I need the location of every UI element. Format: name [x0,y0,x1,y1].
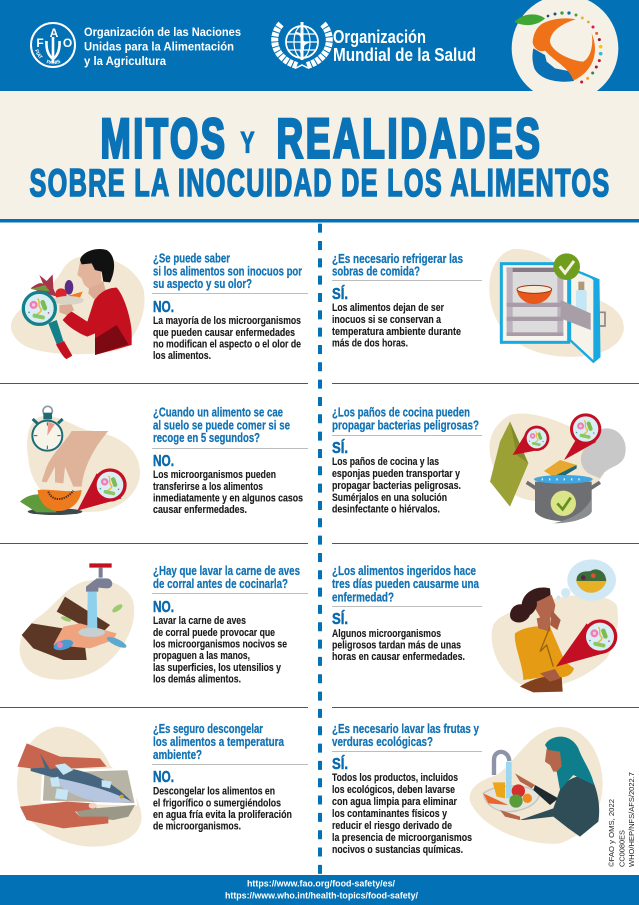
logo: FAO emblem [30,22,76,68]
answer: SÍ. [332,438,348,457]
explanation: el frigorífico o sumergiéndolos [153,798,281,810]
explanation: Los alimentos dejan de ser [332,302,445,314]
question: de corral antes de cocinarla? [153,577,288,591]
footer band with links [0,875,639,905]
illustration: hands under tap [20,563,134,680]
answer: SÍ. [332,284,348,303]
logo: FAO emblem: F [36,36,44,50]
illustration: open fridge with bowl [489,249,624,362]
copyright note: WHO/HEP/NFS/AFS/2022.7 [627,772,636,867]
panel: lavar carne de aves [20,563,308,686]
answer: SÍ. [332,609,348,628]
explanation: peligrosos tardan más de unas [332,640,461,652]
answer: SÍ. [332,754,348,773]
explanation [332,628,465,663]
FAO name: Organización de las Naciones [84,25,241,39]
FAO name: y la Agricultura [84,54,166,68]
explanation: temperatura ambiente durante [332,326,461,338]
question: los alimentos a temperatura [153,735,285,749]
question: si los alimentos son inocuos por [153,264,302,278]
explanation: de corral puede provocar que [153,627,275,639]
explanation: transferirse a los alimentos [153,481,263,493]
explanation: nocivos o sustancias químicas. [332,844,463,856]
question: ¿Los paños de cocina pueden [332,406,470,420]
panel: descongelar [17,722,308,847]
explanation [153,615,287,686]
answer: NO. [153,299,174,316]
explanation [153,469,303,516]
question: ¿Es seguro descongelar [153,722,263,736]
logo: FAO emblem: O [63,36,72,50]
question: ¿Cuando un alimento se cae [153,406,283,420]
explanation: Descongelar los alimentos en [153,786,275,798]
explanation: propaguen a las manos, [153,650,250,662]
explanation: Sumérjalos en una solución [332,492,447,504]
explanation: propagar bacterias peligrosas. [332,480,461,492]
question: enfermedad? [332,590,394,604]
question: tres días pueden causarme una [332,577,480,591]
panel: regla de los 5 segundos [20,406,308,516]
question: ¿Es necesario lavar las frutas y [332,722,479,736]
WHO name: Organización [333,27,426,47]
explanation: la presencia de microorganismos [332,832,472,844]
copyright note [607,772,636,867]
question: ¿Hay que lavar la carne de aves [153,564,300,578]
question [153,722,285,762]
question [332,564,480,604]
explanation: los alimentos. [153,350,211,362]
explanation [153,315,301,362]
explanation: los microorganismos nocivos se [153,638,287,650]
question [153,252,302,291]
question [332,252,463,278]
illustration: hands holding tray with fish [17,727,142,847]
header band [0,0,639,91]
panel: paños de cocina [332,406,626,523]
question: su aspecto y su olor? [153,277,252,291]
explanation [332,456,461,516]
explanation: Los microorganismos pueden [153,469,276,481]
question: ¿Es necesario refrigerar las [332,252,463,266]
question: verduras ecológicas? [332,735,433,749]
panel: alimentos de hace tres días [332,559,618,692]
question: propagar bacterias peligrosas? [332,418,479,432]
explanation: en agua fría evita la proliferación [153,809,292,821]
explanation [153,786,292,832]
question [332,406,479,432]
explanation: horas en causar enfermedades. [332,651,465,663]
panel: refrigerar sobras [332,249,624,362]
question: ambiente? [153,748,202,762]
explanation: causar enfermedades. [153,504,247,516]
explanation: inmediatamente y en algunos casos [153,492,303,504]
explanation: Todos los productos, incluidos [332,772,458,784]
explanation [332,772,472,856]
explanation: las superficies, los utensilios y [153,662,282,674]
panel: saber por aspecto y olor [11,249,308,362]
WHO name [333,27,476,65]
title [100,106,542,170]
question: ¿Los alimentos ingeridos hace [332,564,476,578]
logo: FAO emblem: FIAT PANIS [35,49,60,64]
explanation: con agua limpia para eliminar [332,796,458,808]
illustration: thinking woman [492,559,618,692]
explanation: los demás alimentos. [153,674,241,686]
explanation: los contaminantes físicos y [332,808,448,820]
question: recoge en 5 segundos? [153,431,260,445]
title: MITOS [100,106,228,170]
FAO name: Unidas para la Alimentación [84,40,234,54]
logo circle: food safety heart [512,0,618,102]
illustration: woman washing vegetables [470,727,603,844]
WHO name: Mundial de la Salud [333,45,476,65]
question: ¿Se puede saber [153,252,230,266]
explanation: de microorganismos. [153,820,241,832]
explanation: Algunos microorganismos [332,628,441,640]
explanation: Lavar la carne de aves [153,615,246,627]
answer: NO. [153,453,174,470]
copyright note: ©FAO y OMS, 2022 [607,799,616,867]
answer: NO. [153,599,174,616]
footer band with links: https://www.fao.org/food-safety/es/ [247,878,395,890]
explanation: que pueden causar enfermedades [153,327,295,339]
illustration: stopwatch and hand picking papaya [20,406,140,515]
title: Y [240,126,254,160]
logo: WHO emblem [275,22,329,68]
footer band with links: https://www.who.int/health-topics/food-safety/ [225,890,418,902]
logo: FAO emblem: A [50,26,59,40]
explanation: los ecológicos, deben lavarse [332,784,455,796]
explanation: más de dos horas. [332,338,408,350]
question [153,406,290,445]
answer: NO. [153,769,174,786]
copyright note: CC0080ES [618,830,626,867]
explanation [332,302,461,350]
explanation: no modifican el aspecto o el olor de [153,338,301,350]
explanation: inocuos si se conservan a [332,314,442,326]
title band [0,91,639,219]
illustration: towel and boiling pot [490,413,626,523]
illustration: man smelling food with magnifier [11,249,145,359]
explanation: esponjas pueden transportar y [332,468,461,480]
FAO name [84,25,241,68]
explanation: La mayoría de los microorganismos [153,315,301,327]
panel: frutas y verduras ecológicas [332,722,603,856]
explanation: reducir el riesgo derivado de [332,820,452,832]
question: sobras de comida? [332,264,420,278]
question [332,722,479,749]
title rule [0,219,639,222]
explanation: Los paños de cocina y las [332,456,439,468]
explanation: desinfectante o hiérvalos. [332,504,440,516]
question: al suelo se puede comer si se [153,418,290,432]
question [153,564,300,591]
